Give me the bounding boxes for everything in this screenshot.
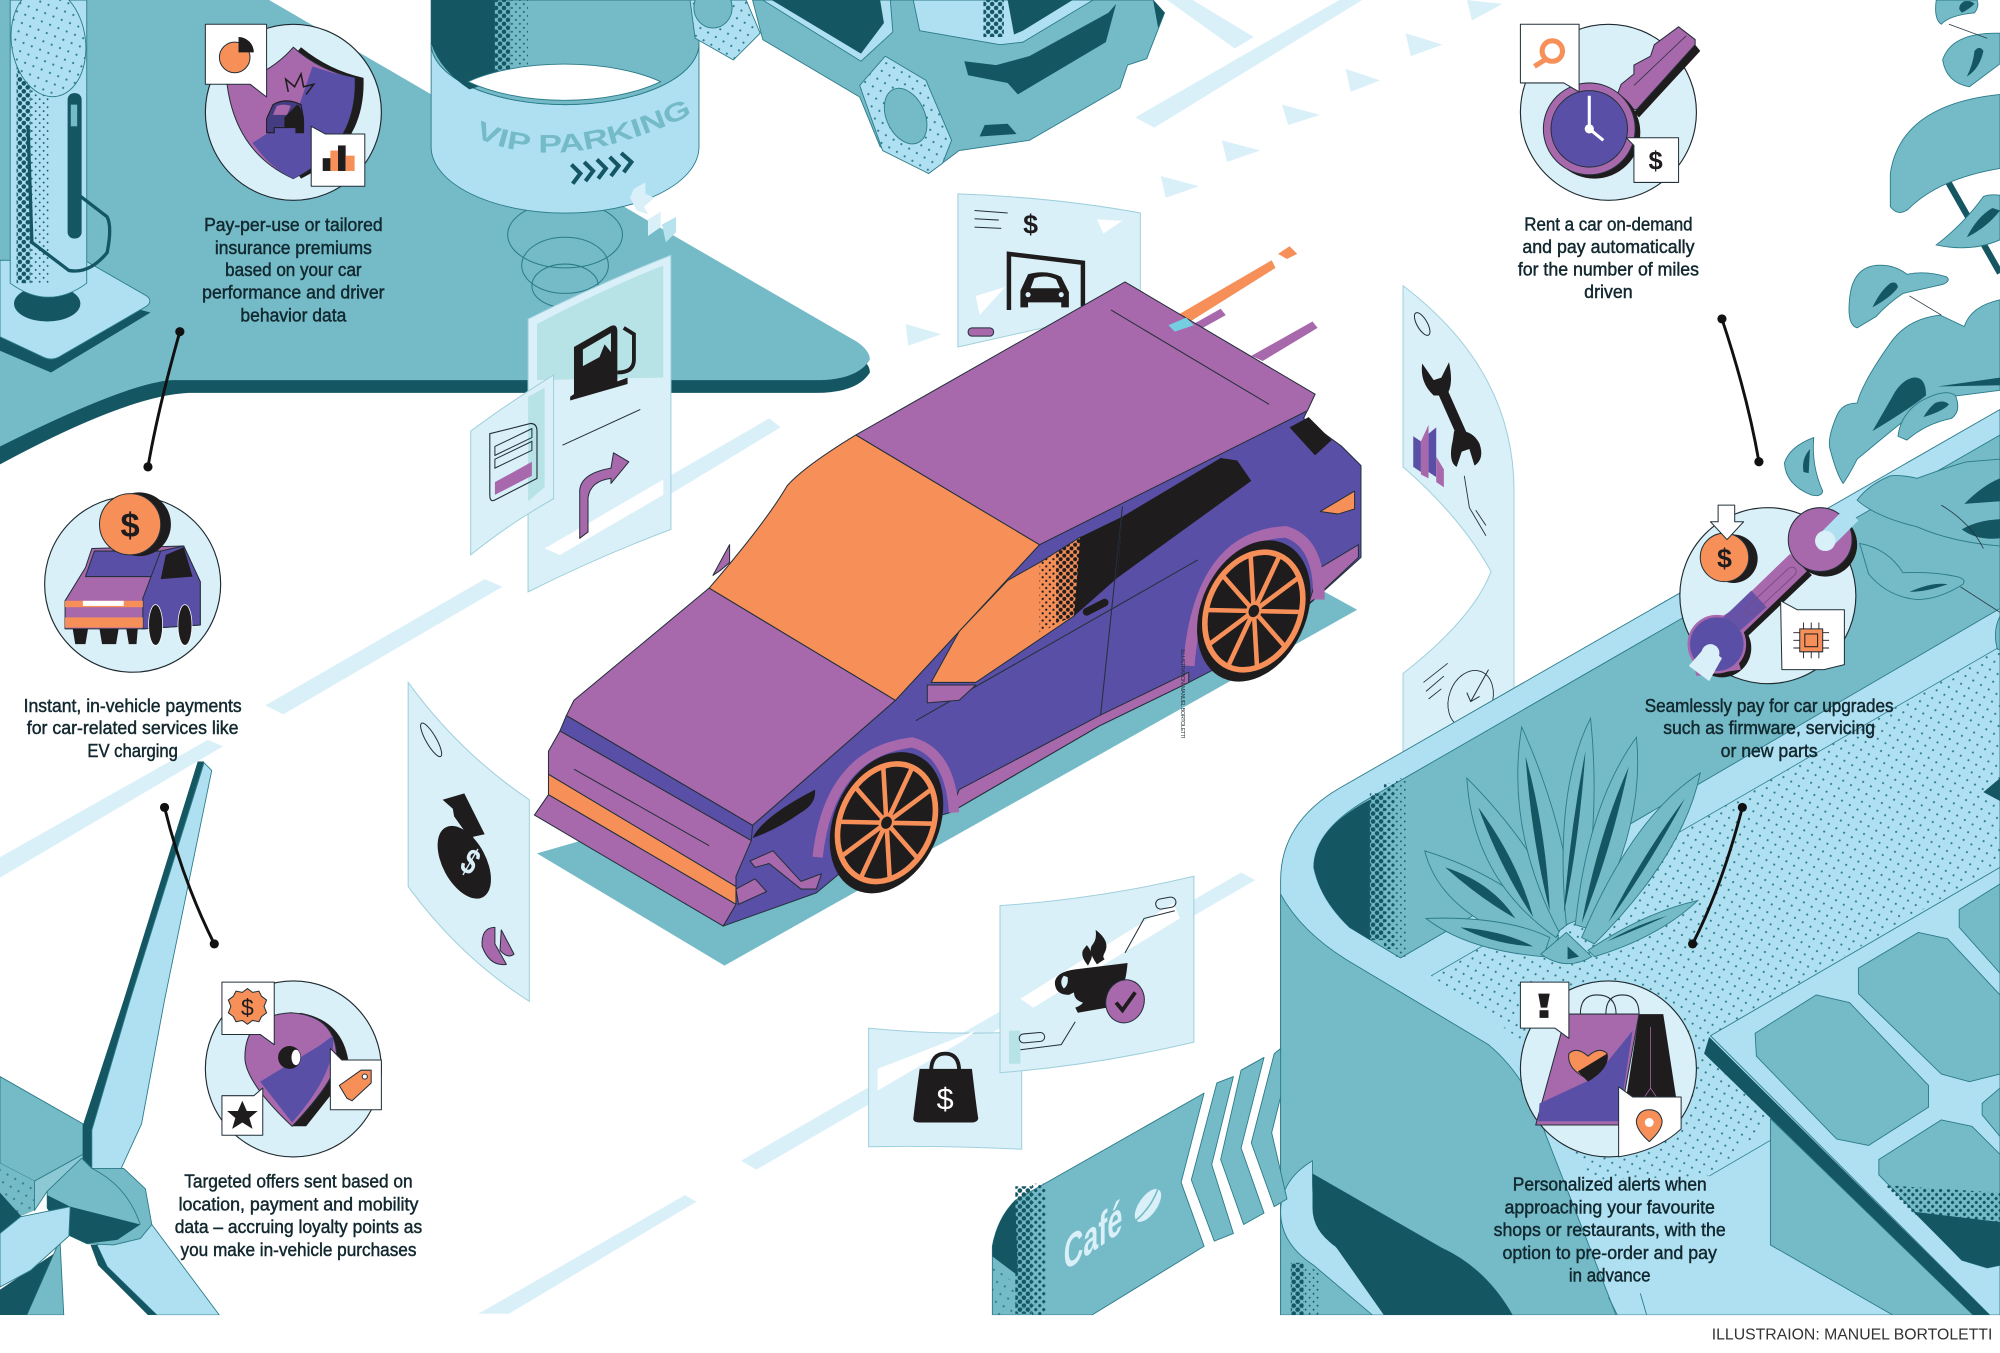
roof streaks [1180, 246, 1318, 361]
location note [1619, 1087, 1681, 1157]
text: insurance [202, 214, 385, 325]
badge note [222, 982, 274, 1045]
icon: pie chart [482, 927, 506, 965]
text: alerts: in advance [1569, 1264, 1651, 1285]
front wheel [808, 734, 965, 912]
text: insurance: Pay-per-use or tailored [204, 214, 383, 235]
hood [566, 588, 895, 825]
car shadow [537, 589, 1357, 966]
blade left [0, 1207, 70, 1287]
tag note [330, 1049, 381, 1110]
icon: garage [1009, 254, 1083, 310]
icon: graduation coin [427, 793, 502, 907]
text: rental: and pay automatically [1522, 236, 1695, 257]
text: payments: for car-related services like [27, 717, 239, 738]
mirror stalk [713, 545, 730, 575]
text: rental: for the number of miles [1518, 259, 1699, 280]
panel: coffee [1000, 876, 1194, 1073]
panel: garage payment [958, 194, 1140, 347]
text: alerts: approaching your favourite [1504, 1197, 1715, 1218]
text: payments [24, 695, 242, 761]
coin [99, 492, 171, 556]
wind turbine [0, 762, 219, 1315]
icon: bars [1413, 436, 1421, 472]
lower planter [1281, 1161, 1513, 1315]
icon: insurance shield [205, 24, 381, 200]
text: offers: you make in-vehicle purchases [180, 1239, 416, 1260]
front band [560, 716, 753, 841]
star note [222, 1088, 263, 1135]
tower [27, 1240, 64, 1315]
text: offers: data – accruing loyalty points as [175, 1216, 422, 1237]
teal platform top left [0, 0, 870, 464]
windshield [709, 435, 1040, 700]
panel: shopping bag: $ [937, 1083, 954, 1117]
icon: coffee bean [1130, 1185, 1166, 1226]
bottom white strip [0, 1315, 2000, 1353]
text: rental [1518, 213, 1699, 302]
blade lower right [97, 1225, 219, 1315]
icon: check badge [1101, 975, 1149, 1027]
icon: graduation coin: $ [454, 840, 487, 883]
dollar sign: $ [1023, 209, 1038, 239]
bar chart note [311, 126, 365, 186]
text: upgrades [1645, 695, 1893, 761]
hub [47, 1158, 152, 1245]
tail light [1320, 491, 1355, 514]
side mirror [927, 685, 976, 703]
side credit: ILLUSTRATION: MANUEL BORTOLETTI [1179, 649, 1185, 739]
text: insurance: behavior data [240, 304, 347, 325]
panel: statement list [471, 375, 554, 555]
bumper trim [750, 851, 821, 889]
connector pills [1020, 911, 1175, 1050]
coin: $ [1717, 544, 1732, 574]
café lettering: Café [1064, 1190, 1122, 1282]
café sign [992, 1049, 1287, 1315]
icon: spanner [1422, 362, 1481, 467]
planter inner wall [1314, 435, 2000, 958]
text: alerts [1494, 1174, 1726, 1285]
car [534, 246, 1361, 966]
front fascia [548, 731, 751, 887]
planter and plaza on the right [1281, 409, 2000, 1315]
icon: car [1020, 272, 1069, 307]
front wheel arch [818, 742, 954, 857]
icon: location offers [205, 981, 381, 1157]
text: insurance: performance and driver [202, 282, 385, 303]
text: offers [175, 1171, 422, 1260]
headlight [753, 790, 815, 838]
text: alerts: Personalized alerts when [1513, 1174, 1707, 1195]
roof [856, 282, 1315, 545]
icon: coffee cup [1055, 930, 1128, 1013]
autonomous vehicle top [690, 0, 1165, 174]
chevrons [571, 153, 631, 184]
text: offers: location, payment and mobility [179, 1193, 419, 1214]
text: rental: driven [1584, 281, 1633, 302]
coin: $ [121, 507, 140, 545]
text: offers: Targeted offers sent based on [184, 1171, 413, 1192]
panel: tools and charts [1403, 286, 1514, 765]
icon: shopping bags [1520, 981, 1696, 1157]
monstera leaves [1784, 0, 2000, 649]
road markings [0, 0, 1503, 1314]
blade upward [83, 762, 204, 1168]
text: upgrades: or new parts [1721, 740, 1818, 761]
solar panel deck [1704, 778, 2000, 1315]
text: insurance: insurance premiums [215, 237, 372, 258]
heart [1569, 1050, 1607, 1082]
rear wheel arch [1189, 532, 1319, 666]
credit line: ILLUSTRAION: MANUEL BORTOLETTI [1712, 1326, 1992, 1343]
icon: clock key [1520, 24, 1700, 200]
door lines and handle [916, 506, 1198, 726]
pie chart note [205, 24, 267, 97]
shield car [267, 101, 304, 133]
alert note [1520, 982, 1569, 1038]
text: rental: Rent a car on-demand [1524, 213, 1693, 234]
icon: turn arrow [580, 453, 629, 538]
planter front wall [1281, 894, 1616, 1315]
price note: $ [1649, 148, 1663, 176]
chip note [1781, 601, 1844, 670]
text: upgrades: such as firmware, servicing [1663, 717, 1875, 738]
arrow [1710, 505, 1744, 540]
text: payments: Instant, in-vehicle payments [24, 695, 242, 716]
magnifier note [1520, 24, 1579, 92]
text: payments: EV charging [87, 740, 178, 761]
coin [1700, 533, 1758, 583]
text: insurance: based on your car [225, 259, 362, 280]
dotted floor [1431, 647, 2000, 1180]
connector lines [143, 314, 1764, 949]
icon: bag [913, 1069, 978, 1122]
text: alerts: option to pre-order and pay [1503, 1242, 1717, 1263]
icon: spanner upgrades [1680, 505, 1858, 684]
VIP parking cylinder [430, 0, 700, 306]
icon: car with coin [45, 492, 221, 672]
panel: fuel and navigation [528, 255, 671, 592]
text: alerts: shops or restaurants, with the [1494, 1219, 1726, 1240]
panel: education loan [408, 682, 529, 1001]
vip parking lettering: VIP PARKING [480, 102, 690, 153]
icon: fuel pump [570, 325, 634, 401]
price note [1626, 138, 1679, 182]
panel: shopping bag [869, 1028, 1022, 1149]
side window [931, 537, 1080, 682]
agave plant [1425, 718, 1700, 964]
text: upgrades: Seamlessly pay for car upgrades [1645, 695, 1893, 716]
badge note: $ [241, 994, 254, 1020]
car side body [723, 394, 1361, 926]
rocker strips [950, 672, 1189, 813]
rear wheel [1175, 522, 1332, 700]
EV charging post [0, 0, 151, 372]
